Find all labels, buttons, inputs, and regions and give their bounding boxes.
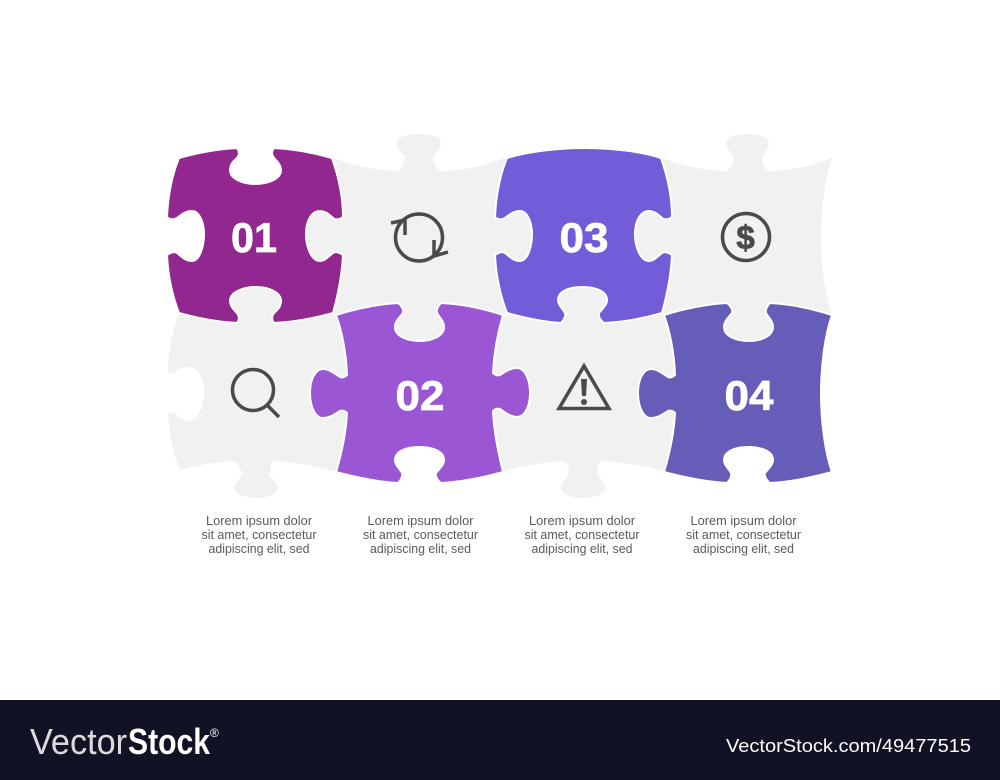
icon: warning <box>559 366 609 408</box>
piece 02 <box>310 303 530 483</box>
piece 03 <box>495 148 672 323</box>
caption 1: sit amet, consectetur <box>202 528 316 542</box>
footer logo: ® <box>210 726 219 740</box>
number 02: 02 <box>396 372 444 419</box>
caption 1: adipiscing elit, sed <box>208 542 310 556</box>
caption 1 <box>202 514 316 556</box>
number 03: 03 <box>560 214 608 261</box>
number 01: 01 <box>231 214 277 261</box>
caption 1: Lorem ipsum dolor <box>206 514 312 528</box>
caption 4: Lorem ipsum dolor <box>690 514 796 528</box>
icon: search <box>232 370 279 417</box>
caption 4 <box>686 514 801 556</box>
caption 2 <box>363 514 478 556</box>
footer logo: Vector <box>30 721 127 762</box>
piece 04 <box>638 303 832 483</box>
number 04: 04 <box>724 372 774 419</box>
gray piece: dollar <box>625 134 832 345</box>
gray piece: refresh <box>300 134 540 345</box>
caption 3: adipiscing elit, sed <box>532 542 633 556</box>
caption 3 <box>524 514 640 556</box>
footer logo <box>30 721 219 762</box>
gray piece: search <box>168 285 360 498</box>
caption 3: sit amet, consectetur <box>524 528 640 542</box>
puzzle infographic <box>167 134 832 498</box>
icon: dollar: $ <box>736 219 755 256</box>
piece 01 <box>167 148 343 323</box>
caption 2: sit amet, consectetur <box>363 528 478 542</box>
icon: dollar <box>722 214 770 260</box>
caption 3: Lorem ipsum dolor <box>529 514 635 528</box>
footer logo: Stock <box>128 721 211 762</box>
icon: refresh <box>391 214 448 261</box>
gray piece: warning <box>480 285 685 498</box>
footer bar <box>0 700 1000 780</box>
caption 2: Lorem ipsum dolor <box>368 514 474 528</box>
caption 2: adipiscing elit, sed <box>370 542 471 556</box>
caption 4: sit amet, consectetur <box>686 528 801 542</box>
footer image id: VectorStock.com/49477515 <box>726 736 971 756</box>
caption 4: adipiscing elit, sed <box>693 542 794 556</box>
